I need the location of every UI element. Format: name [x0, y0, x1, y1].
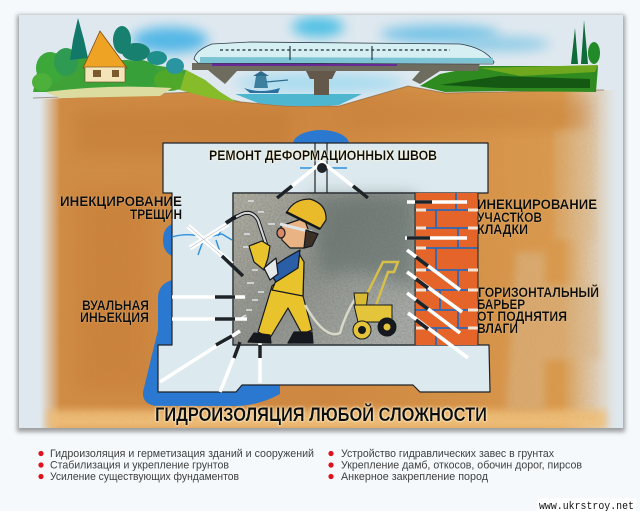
brick injection tubes [405, 202, 468, 358]
panel paper [19, 15, 623, 428]
label: horizontal barrier [477, 285, 599, 336]
label: crack injection: ИНЕКЦИРОВАНИЕ [60, 194, 182, 209]
bullet list: right column: Укрепление дамб, откосов, обочин дорог, пирсов [341, 460, 582, 472]
teal trees [70, 18, 184, 74]
worker torso [272, 252, 304, 296]
bullet list: left column: Стабилизация и укрепление грунтов [50, 460, 229, 472]
label: masonry injection: УЧАСТКОВ [477, 210, 542, 225]
expansion joint injectors [277, 143, 368, 198]
curtain injection tubes [160, 297, 260, 392]
soil [40, 85, 620, 430]
wall interior [233, 193, 416, 345]
bridge [192, 63, 480, 95]
worker legs [258, 262, 312, 338]
label: crack injection [60, 194, 182, 222]
boat with fisherman [244, 71, 288, 93]
sky wash [132, 17, 550, 93]
brick wall [415, 193, 478, 345]
mortar splatter [241, 201, 275, 318]
worker [232, 199, 326, 343]
label: masonry injection: КЛАДКИ [477, 222, 528, 237]
ground edge line [33, 86, 604, 106]
title: ГИДРОИЗОЛЯЦИЯ ЛЮБОЙ СЛОЖНОСТИ [155, 402, 487, 426]
bullet list: left column: Гидроизоляция и герметизация зданий и сооружений [50, 448, 314, 460]
foundation structure [143, 130, 490, 406]
river [235, 94, 362, 106]
train [194, 42, 494, 64]
label: horizontal barrier: ОТ ПОДНЯТИЯ [477, 309, 567, 324]
left lawn [45, 87, 172, 98]
bullet list: right column: Устройство гидравлических завес в грунтах [341, 448, 554, 460]
illustration panel [17, 15, 625, 432]
label: masonry injection: ИНЕКЦИРОВАНИЕ [477, 197, 597, 212]
worker helmet [287, 199, 326, 229]
label: horizontal barrier: ВЛАГИ [477, 321, 518, 336]
label: crack injection: ТРЕЩИН [130, 207, 182, 222]
bullet list: left column [38, 448, 314, 483]
bullet list: right column [328, 448, 582, 483]
left bushes [32, 48, 236, 102]
concrete slabs and column [158, 143, 490, 392]
heading: deformation joints label: РЕМОНТ ДЕФОРМАЦИОННЫХ ШВОВ [209, 147, 437, 163]
label: horizontal barrier: ГОРИЗОНТАЛЬНЫЙ [478, 285, 599, 300]
label: masonry injection [477, 197, 597, 237]
bullet list: right column: Анкерное закрепление пород [341, 471, 489, 483]
watercolor illustration [32, 17, 620, 430]
pump [305, 262, 398, 339]
trees and house [32, 18, 236, 102]
label: veil injection: ВУАЛЬНАЯ [82, 298, 149, 313]
bullet list: left column: Усиление существующих фундаментов [50, 471, 239, 483]
panel shadow [17, 15, 625, 432]
label: veil injection: ИНЬЕКЦИЯ [80, 310, 149, 325]
label: veil injection [80, 298, 149, 325]
injection gun tube [232, 213, 267, 247]
house [83, 31, 127, 68]
label: horizontal barrier: БАРЬЕР [477, 297, 525, 312]
water seepage [143, 130, 349, 406]
crack and crossed injectors [172, 216, 243, 276]
right trees and bushes [420, 20, 600, 92]
worker boots [248, 332, 313, 343]
worker head [281, 218, 312, 248]
worker glove [249, 241, 270, 270]
